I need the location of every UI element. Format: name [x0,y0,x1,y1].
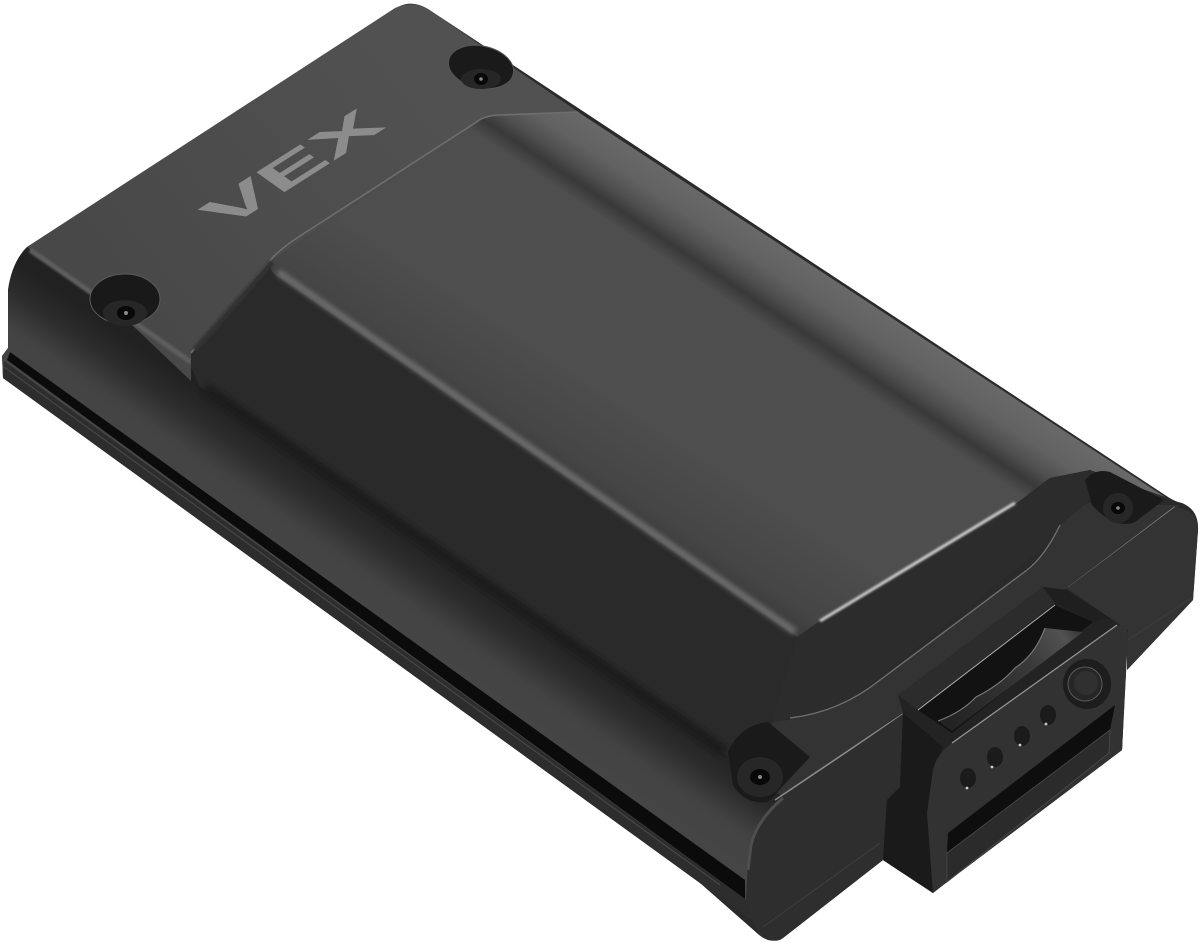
indicator 4 [1040,705,1056,725]
screw: left [90,274,160,326]
cover shoulder shadow [195,262,272,350]
screw: lower right [1085,471,1164,524]
connector housing [883,587,1128,893]
lip rear block [1043,587,1110,622]
bottom end corner highlight [748,798,783,870]
connector side wall [883,713,943,893]
screw: lower left [728,722,810,802]
long ridge highlight [278,272,795,632]
flank lower shadow [205,388,725,752]
front shelf edge [775,507,1175,800]
indicator 2 [987,747,1003,768]
lower slot [947,705,1115,853]
cover flank [191,263,797,758]
lower tab [947,730,1110,882]
front bevel highlight [820,503,1015,621]
front shelf [745,503,1180,797]
cover top surface [268,112,1165,637]
indicator 3 [1014,726,1030,746]
power button [1063,659,1111,709]
indicator 1 [960,768,976,789]
end plate with logo area [27,4,590,381]
VEX logo: VEX [189,101,396,236]
front bevel of cover [773,470,1110,722]
contact roller [938,628,1083,731]
plate edge highlight [30,250,191,362]
contact slot [918,605,1093,733]
connector front face [927,625,1128,893]
bottom end wall [746,714,903,941]
cover lower edge highlight [790,525,1060,718]
right end wall [1067,507,1198,670]
connector top lip [898,587,1055,710]
front face top highlight [952,625,1117,743]
end wall seams [763,597,1193,927]
contact wave line [938,628,1045,721]
lip lower highlight [918,605,1055,710]
side wall [2,247,783,918]
cover seam curve [191,112,578,353]
screw: top [444,40,518,94]
mounting rail groove [3,352,763,927]
